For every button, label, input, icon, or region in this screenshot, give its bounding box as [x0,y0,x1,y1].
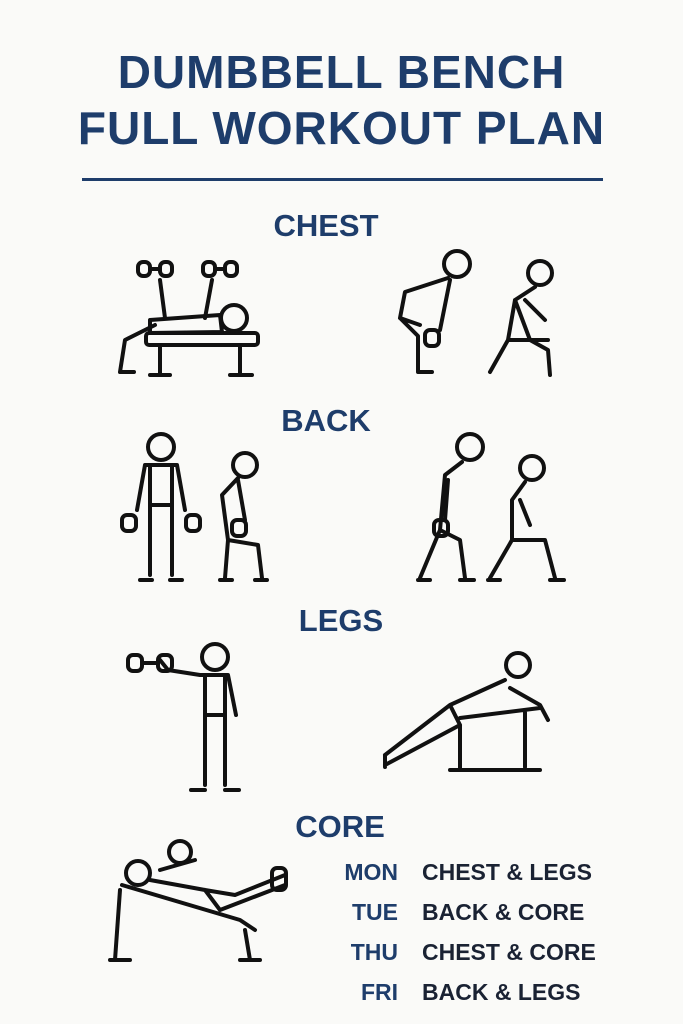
title [78,46,605,154]
icon: incline bench crunch [110,841,286,960]
icon: incline push-up [385,653,548,770]
heading: legs: LEGS [299,603,383,638]
schedule: BACK & LEGS [422,979,580,1005]
icon: shoulder press [128,644,239,790]
heading: chest: CHEST [273,208,379,243]
icon: bench press [120,262,258,375]
schedule: TUE [352,899,398,925]
schedule [344,859,596,1005]
schedule: BACK & CORE [422,899,584,925]
heading: back: BACK [281,403,371,438]
schedule: CHEST & CORE [422,939,596,965]
icon: deadlift and lunge [400,251,552,375]
schedule: THU [351,939,398,965]
icon: standing row pair [122,434,267,580]
schedule: FRI [361,979,398,1005]
icon: bent row and lunge [418,434,564,580]
title: FULL WORKOUT PLAN [78,102,605,154]
title: DUMBBELL BENCH [118,46,565,98]
schedule: CHEST & LEGS [422,859,592,885]
heading: core: CORE [295,809,385,844]
schedule: MON [344,859,398,885]
